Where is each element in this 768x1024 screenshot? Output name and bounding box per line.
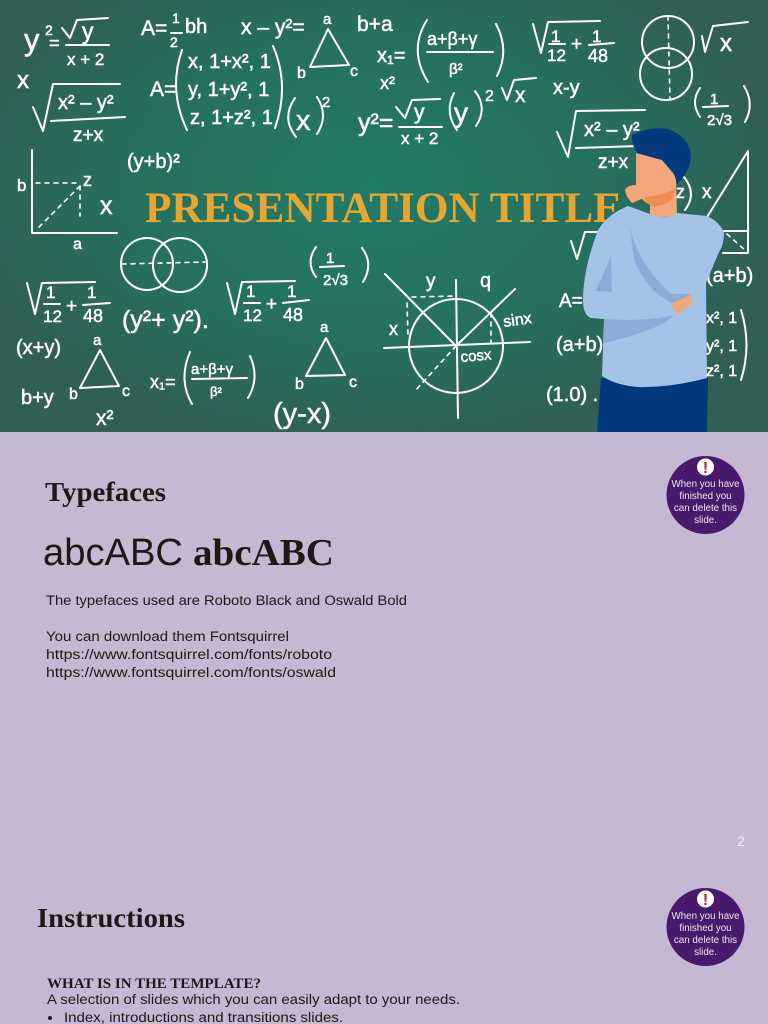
formula: y minus x: (y-x)	[273, 398, 331, 430]
formula: x minus y squared: x – y²=	[241, 16, 305, 39]
triangle abc middle: a	[320, 319, 329, 336]
formula: x1 upper: a+β+γ	[427, 29, 477, 49]
badge: delete notice 1: slide.	[694, 515, 717, 526]
formula: root sum middle	[227, 281, 309, 325]
formula: x1 lower	[150, 352, 255, 404]
neck and face	[636, 153, 677, 218]
right triangle diagram: z	[676, 182, 685, 202]
formula: b plus a: b+a	[357, 13, 393, 36]
formula: y squared fraction: =	[49, 33, 60, 53]
badge: delete notice 2: finished you	[679, 923, 732, 934]
formula: x squared in brackets: 2	[322, 94, 330, 111]
formula: root of x2-y2: z+x	[73, 125, 104, 146]
formula: root x top right: x	[720, 30, 732, 57]
badge: delete notice 2: !	[703, 892, 708, 909]
triangle abc: a	[323, 11, 332, 28]
formula: root sum of fractions: 48	[83, 306, 103, 326]
badge: delete notice 2: can delete this	[674, 935, 737, 946]
page number: 2	[737, 833, 745, 849]
panel: chalkboard banner	[0, 0, 768, 432]
formula: x plus y: (x+y)	[16, 337, 61, 359]
formula: root sum middle: 48	[283, 305, 303, 325]
formula: root sum of fractions: 1	[46, 283, 55, 302]
formula: area of triangle: A=	[141, 17, 167, 40]
text block: typeface notes: The typefaces used are Roboto Black and Oswald Bold	[46, 593, 407, 609]
formula: root sum upper right: 1	[592, 27, 601, 46]
formula: root of x2-y2: x² – y²	[58, 92, 114, 114]
formula: y squared fraction centre: y	[414, 101, 425, 124]
formula: root sum upper right: 1	[551, 27, 560, 46]
badge: delete notice 1: finished you	[679, 491, 732, 502]
formula: root sum of fractions: 1	[87, 283, 96, 302]
formula: y plus b squared: (y+b)²	[127, 151, 180, 173]
formula: matrix A: z, 1+z², 1	[190, 107, 273, 129]
label one point zero: (1.0) .	[546, 384, 598, 406]
badge: delete notice 1: can delete this	[674, 503, 737, 514]
formula: root sum middle: 12	[243, 306, 262, 325]
triangle abc middle	[295, 319, 357, 393]
neck shadow	[644, 188, 676, 206]
formula: x1 lower: x₁=	[150, 372, 176, 392]
formula: b plus y: b+y	[21, 387, 54, 409]
sweater shade under arm	[604, 315, 674, 343]
formula: root sum middle: 1	[287, 282, 296, 301]
formula: x squared in brackets	[288, 94, 330, 137]
formula: root sum of fractions: +	[66, 296, 77, 317]
formula: y squared in brackets: y	[454, 97, 468, 128]
typeface sample: serif bold: abcABC	[193, 532, 334, 574]
illustration: thinking man	[583, 128, 724, 432]
heading: typefaces: Typefaces	[45, 477, 166, 507]
sweater fold left	[596, 256, 612, 292]
formula: matrix A: A=	[150, 78, 176, 101]
formula: one over 2 root 3	[310, 247, 368, 289]
typeface sample: sans: abcABC	[43, 532, 183, 574]
formula: y squared fraction: x + 2	[67, 50, 104, 69]
triangle abc middle: b	[295, 376, 304, 393]
badge: delete notice 2: When you have	[671, 911, 740, 922]
formula: root sum upper right	[533, 21, 614, 66]
formula: y squared fraction	[24, 18, 109, 69]
triangle abc: b	[297, 65, 306, 82]
formula: y squared sum: (y²+ y²).	[122, 306, 209, 334]
badge: delete notice 2	[666, 888, 744, 966]
label A equals: A=	[559, 291, 583, 312]
sweater fold arm	[629, 223, 692, 304]
formula: x minus y small: x-y	[553, 77, 580, 99]
partial matrix right: z², 1	[706, 363, 737, 380]
formula: x1 lower: β²	[210, 384, 222, 399]
triangle abc middle: c	[349, 374, 357, 391]
formula: area of triangle: 1	[172, 10, 180, 26]
text block: typeface notes	[46, 593, 407, 681]
triangle abc lower left: a	[93, 332, 102, 349]
vertical venn circles	[640, 16, 694, 100]
formula: root sum middle: 1	[246, 282, 255, 301]
formula: one over 2 root 3: 1	[326, 250, 334, 267]
lower hand	[671, 294, 692, 314]
formula: root sum of fractions	[27, 282, 110, 326]
triangle abc lower left: c	[122, 383, 130, 400]
formula: y squared fraction: 2	[45, 22, 53, 38]
formula: root x2-y2 right: z+x	[598, 152, 629, 173]
hair	[632, 128, 691, 184]
formula: root sum upper right: +	[571, 34, 582, 55]
triangle abc lower left	[69, 332, 130, 403]
formula: x1 upper: β²	[449, 61, 463, 78]
formula: root x	[502, 78, 536, 107]
hand on chin	[625, 185, 646, 203]
text block: template contents	[47, 976, 460, 1024]
formula: one over 2 root 3: 2√3	[323, 272, 348, 289]
axes diagram: b	[17, 176, 26, 195]
axes diagram: a	[73, 236, 82, 253]
formula: area of triangle: bh	[185, 16, 207, 38]
axes diagram	[17, 150, 117, 253]
formula: root sum upper right: 48	[588, 46, 608, 66]
formula: a plus b: (a+b)	[556, 334, 603, 356]
formula: x squared in brackets: x	[296, 105, 311, 137]
right triangle diagram: x	[702, 182, 712, 203]
badge: delete notice 1	[666, 456, 744, 534]
lower slide background	[0, 432, 768, 1024]
formula: one over 2 root 3 right: 1	[710, 91, 718, 108]
formula: x1 lower: a+β+γ	[191, 361, 233, 378]
unit circle diagram	[384, 270, 533, 418]
formula: root x: x	[515, 84, 526, 107]
text block: template contents: A selection of slides which you can easily adapt to your needs.	[47, 992, 460, 1008]
triangle abc: c	[350, 63, 358, 80]
partial matrix right: y², 1	[706, 338, 737, 355]
formula: y squared fraction: y	[24, 22, 40, 57]
formula: root sum upper right: 12	[547, 46, 566, 65]
pants	[597, 378, 708, 432]
heading: instructions: Instructions	[37, 903, 185, 933]
formula: area of triangle	[141, 10, 207, 50]
venn circles	[121, 238, 207, 292]
formula: area of triangle: 2	[170, 34, 178, 50]
axes diagram: z	[83, 170, 92, 190]
triangle abc	[297, 11, 358, 82]
formula: matrix A: y, 1+y², 1	[188, 79, 269, 101]
formula: one over 2 root 3 right: 2√3	[707, 112, 732, 129]
formula: x squared: x²	[96, 407, 114, 430]
formula: x1 upper	[377, 20, 503, 82]
formula: x squared: x²	[380, 73, 395, 93]
formula: root x2-y2 right	[557, 110, 645, 173]
text block: typeface notes: https://www.fontsquirrel.com/fonts/oswald	[46, 665, 336, 681]
partial matrix right: x², 1	[706, 310, 737, 327]
formula: y squared in brackets	[450, 88, 494, 130]
formula: root x2-y2 right: x² – y²	[584, 119, 640, 141]
sweater	[583, 206, 724, 387]
label x: x	[17, 67, 29, 94]
right triangle diagram	[676, 151, 748, 253]
formula: y squared fraction centre: x + 2	[401, 129, 438, 148]
formula: y squared fraction centre	[358, 99, 442, 148]
text block: typeface notes: https://www.fontsquirrel.com/fonts/roboto	[46, 647, 332, 663]
formula: root sum middle: +	[266, 294, 277, 315]
unit circle diagram: x	[389, 319, 398, 339]
formula: root x top right	[702, 22, 748, 57]
unit circle diagram: sinx	[502, 310, 533, 331]
unit circle diagram: q	[480, 270, 491, 292]
formula: y squared in brackets: 2	[485, 88, 494, 105]
title: PRESENTATION TITLE	[145, 185, 622, 232]
unit circle diagram: y	[426, 271, 436, 292]
text block: template contents: WHAT IS IN THE TEMPLATE?	[47, 976, 261, 992]
formula: y squared fraction centre: y²=	[358, 109, 393, 137]
badge: delete notice 1: When you have	[671, 479, 740, 490]
formula: matrix A	[150, 46, 282, 130]
partial root behind person	[571, 232, 600, 259]
text block: typeface notes: You can download them Fontsquirrel	[46, 629, 289, 645]
formula: root of x2-y2	[33, 84, 125, 146]
formula: y squared fraction: y	[82, 18, 94, 44]
formula: root sum of fractions: 12	[43, 307, 62, 326]
chalk formulas	[16, 10, 753, 430]
unit circle diagram: cosx	[460, 346, 493, 366]
formula: a plus b right: (a+b)	[706, 265, 753, 287]
formula: matrix A: x, 1+x², 1	[188, 51, 271, 73]
partial matrix right	[706, 310, 746, 380]
badge: delete notice 2: slide.	[694, 947, 717, 958]
formula: one over 2 root 3 right	[695, 86, 750, 129]
axes diagram: x	[100, 192, 113, 220]
formula: x1 upper: x₁=	[377, 45, 405, 67]
badge: delete notice 1: !	[703, 460, 708, 477]
triangle abc lower left: b	[69, 386, 78, 403]
